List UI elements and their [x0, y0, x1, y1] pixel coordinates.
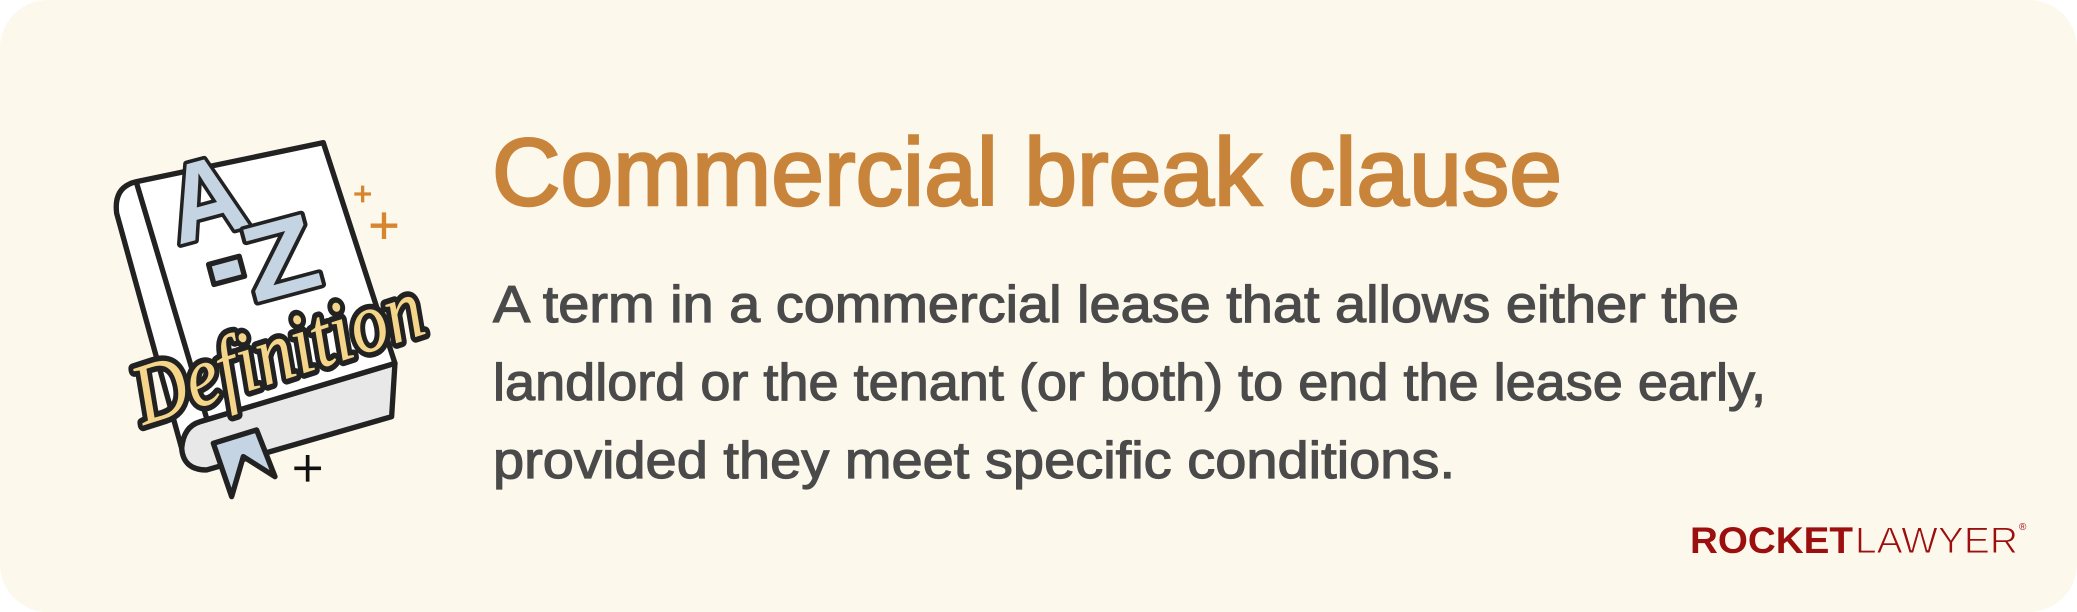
logo: Rocket Lawyer — [1690, 520, 2027, 561]
definition text: landlord or the tenant (or both) to end the lease early, — [493, 354, 1766, 412]
logo: Rocket Lawyer: ROCKET — [1690, 520, 1853, 561]
spine line — [137, 183, 207, 418]
dash — [209, 256, 245, 284]
definition text — [493, 276, 1766, 490]
letter A: A — [152, 129, 258, 268]
title: Commercial break clause — [492, 119, 1562, 226]
sparkles — [354, 186, 397, 239]
letter Z: Z — [229, 190, 331, 325]
book cover — [116, 143, 395, 448]
Definition script label: Definition — [119, 259, 435, 444]
book pages block — [182, 363, 395, 470]
logo: Rocket Lawyer: ® — [2019, 522, 2027, 533]
logo: Rocket Lawyer: LAWYER — [1855, 520, 2018, 561]
icon: definition book — [116, 129, 435, 497]
bookmark — [213, 430, 275, 497]
definition text: provided they meet specific conditions. — [493, 432, 1455, 490]
definition text: A term in a commercial lease that allows either the — [493, 276, 1739, 334]
